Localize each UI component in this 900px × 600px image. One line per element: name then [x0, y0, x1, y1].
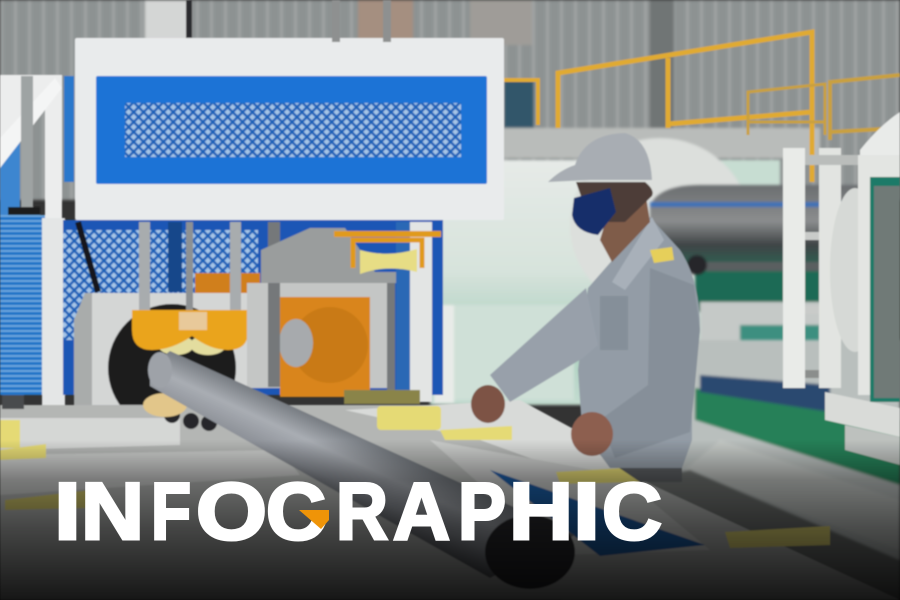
mask	[572, 188, 616, 235]
pipe sizing unit	[74, 222, 248, 432]
yellow safety railings	[504, 32, 900, 182]
title: INFOGRAPHIC: H	[509, 467, 573, 557]
title: INFOGRAPHIC: F	[151, 467, 191, 557]
cap	[548, 133, 652, 182]
dark bottom gradient	[0, 440, 900, 600]
conveyor bed	[0, 390, 900, 600]
title: INFOGRAPHIC: O	[196, 467, 267, 557]
green floor and lower right equipment	[560, 340, 900, 600]
jacket body	[578, 217, 700, 468]
title: INFOGRAPHIC: A	[393, 467, 450, 557]
shoulder patch	[650, 247, 674, 263]
title: INFOGRAPHIC: C	[602, 467, 662, 557]
neck	[600, 190, 650, 262]
head	[576, 182, 653, 222]
white rack frame at right	[783, 148, 860, 388]
title: INFOGRAPHIC: P	[458, 467, 506, 557]
title: INFOGRAPHIC: C	[266, 467, 326, 557]
title: INFOGRAPHIC: I	[54, 467, 81, 557]
title: INFOGRAPHIC: N	[81, 467, 144, 557]
title: INFOGRAPHIC	[54, 467, 662, 557]
arm raised to hands	[490, 288, 598, 402]
collar	[612, 217, 664, 290]
background: factory wall	[0, 0, 900, 200]
orange rotating unit	[247, 222, 441, 402]
pale green drum machine	[430, 138, 780, 405]
pocket	[600, 296, 628, 350]
title: INFOGRAPHIC: R	[336, 467, 388, 557]
icon: orange triangle in the G	[299, 510, 329, 529]
near arm	[600, 268, 700, 458]
white cabinet with blue panel	[75, 0, 504, 220]
hands	[471, 385, 505, 423]
control cabinet far right	[825, 112, 900, 465]
left blue machine base	[0, 75, 443, 408]
worker	[471, 133, 700, 482]
dark roller at right	[650, 185, 860, 360]
grey PVC pipe	[148, 351, 575, 589]
title: INFOGRAPHIC: I	[573, 467, 600, 557]
trousers	[600, 455, 682, 482]
